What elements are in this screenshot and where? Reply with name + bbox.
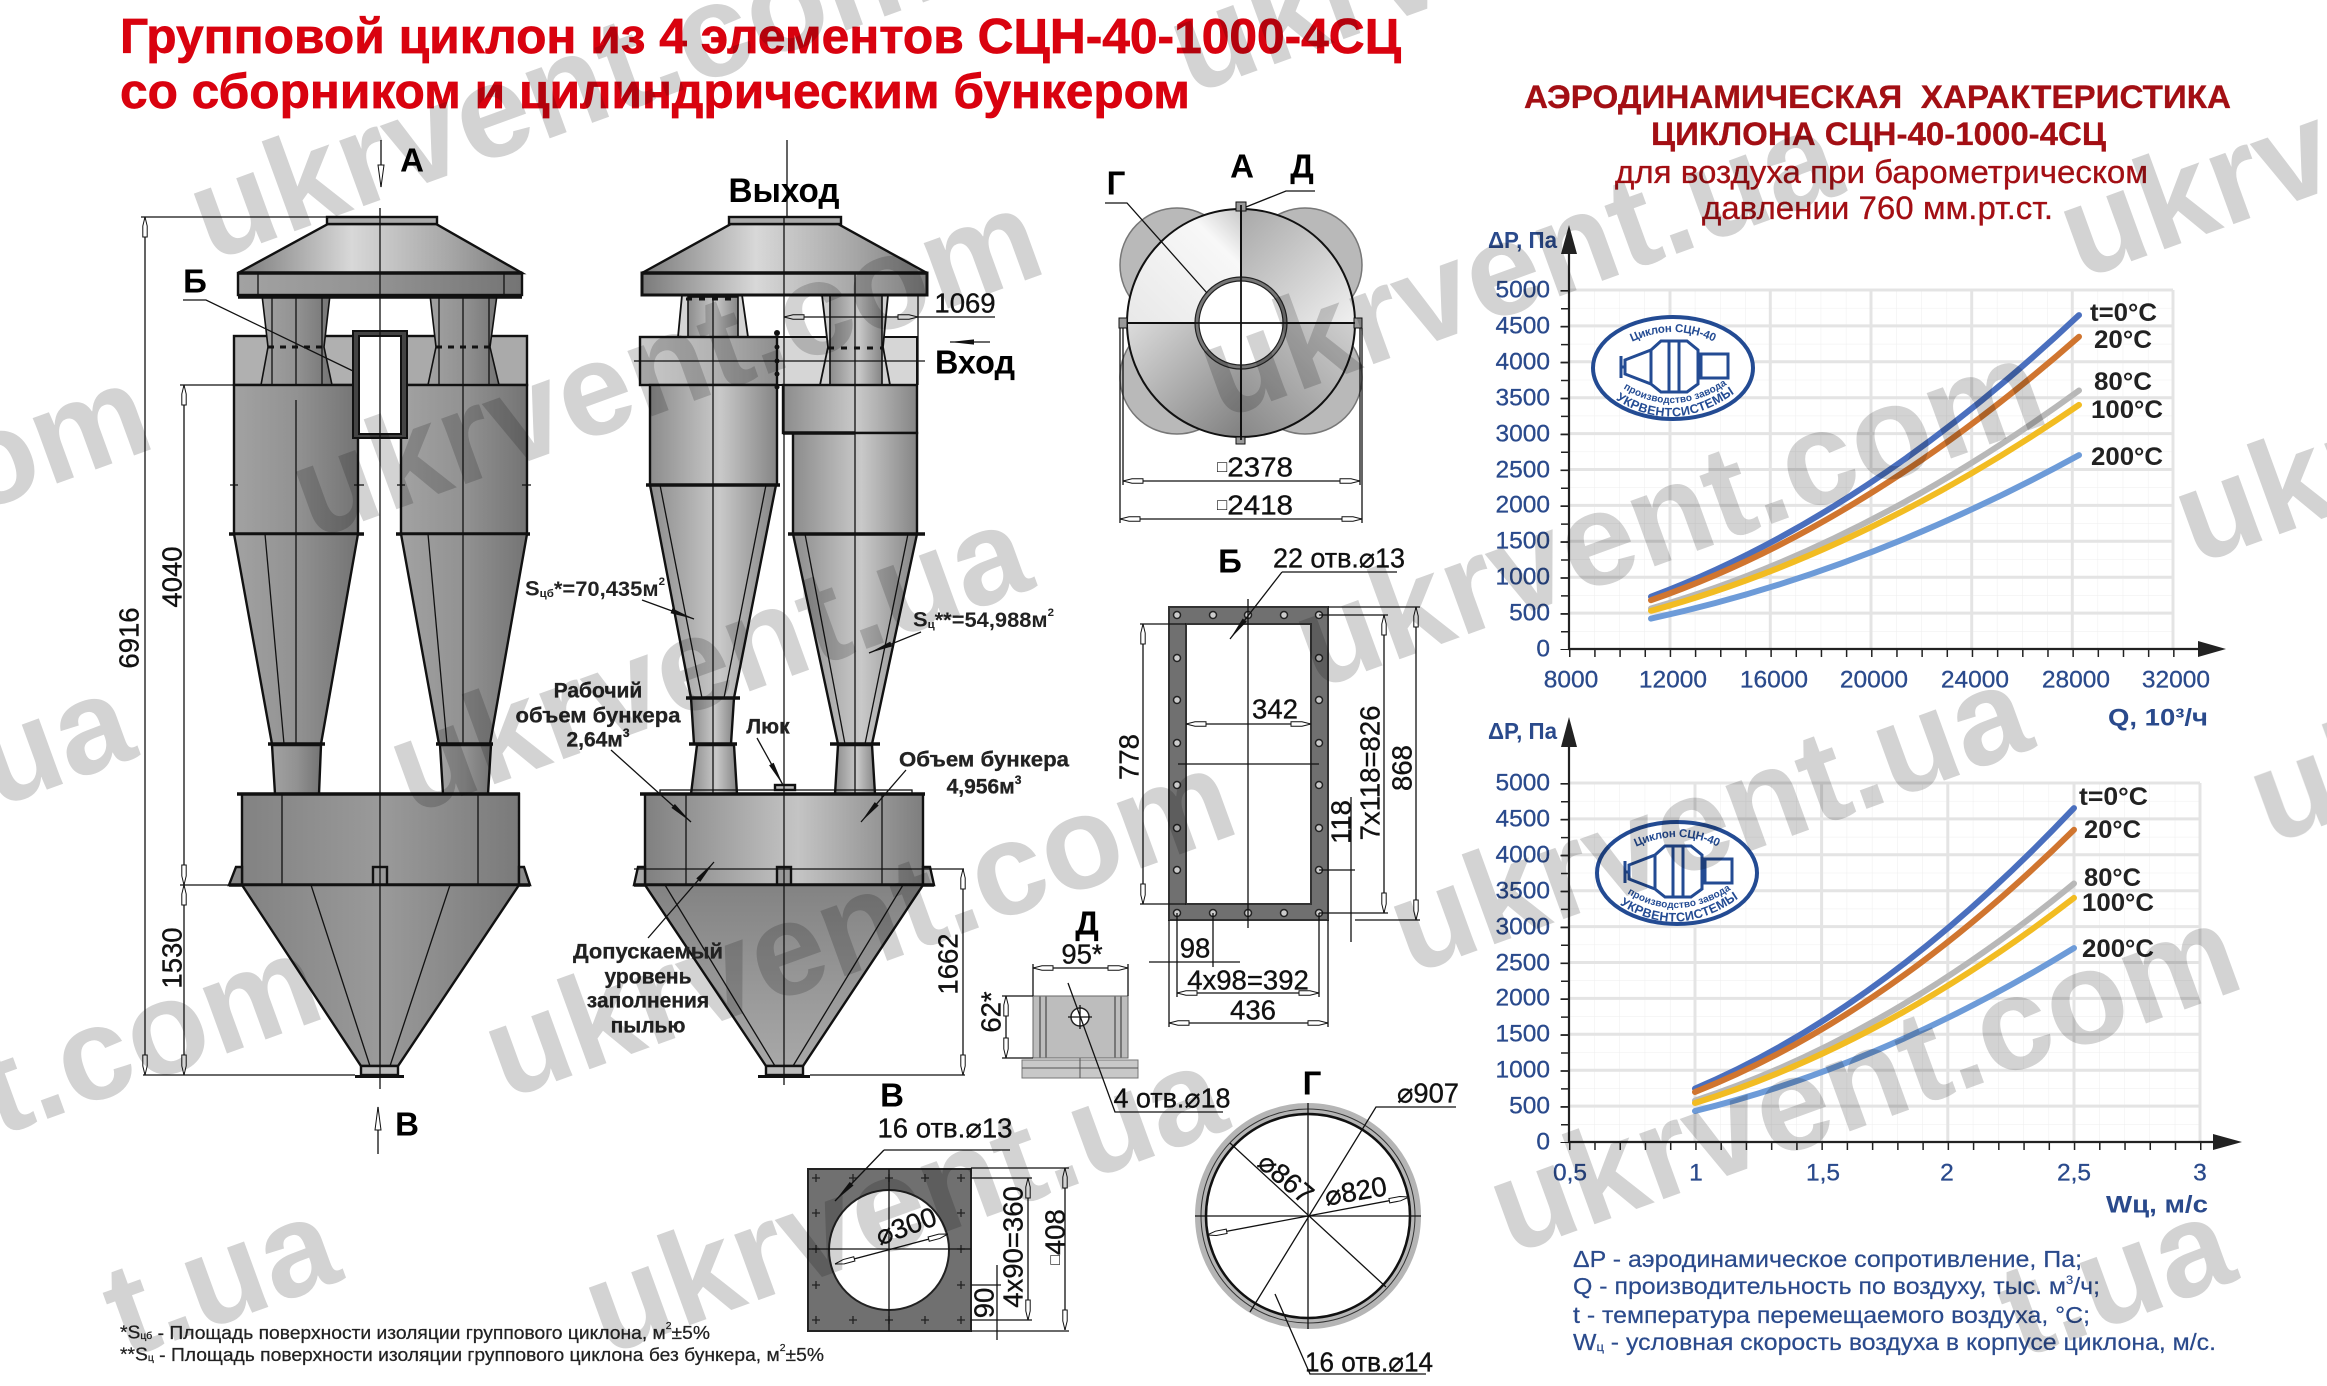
hole note: 4 отв.⌀18 [1114, 1082, 1230, 1114]
dimension 4x98=392 [1177, 913, 1319, 997]
diameter 867: ⌀867 [1252, 1146, 1320, 1210]
legend of symbols: - условная скорость воздуха в корпусе циклона, м/с. [1604, 1329, 2216, 1355]
axes [1561, 717, 2242, 1150]
footnotes: ц [148, 1352, 154, 1364]
label B with leader: Б [183, 262, 207, 300]
footnotes: **S [120, 1344, 147, 1364]
drawing: outlet flange section V [808, 1076, 1070, 1340]
dimension 436: 436 [1230, 994, 1276, 1026]
front view: inlet flange [353, 331, 407, 438]
dimension 778: 778 [1114, 734, 1144, 780]
side view: collector hood [642, 217, 927, 295]
y axis labels: 3000 [1495, 914, 1550, 940]
text: ukrvent.ua [564, 1015, 1243, 1382]
dimension 1530: 1530 [156, 927, 188, 989]
x axis labels: 2,5 [2057, 1160, 2091, 1186]
flange plate [808, 1169, 971, 1331]
curve labels: 200°C [2082, 935, 2154, 963]
y axis labels: 2500 [1495, 456, 1550, 484]
x axis labels: 20000 [1840, 666, 1908, 694]
view arrow B [375, 1106, 419, 1154]
text: ukrvent.ua [369, 474, 1048, 841]
x axis labels: 8000 [1544, 666, 1598, 694]
axes [1195, 1103, 1421, 1329]
dimension 6916: 6916 [114, 607, 144, 669]
collector disc [1127, 209, 1355, 437]
curve labels: 20°C [2094, 326, 2152, 354]
front view: collector hood [238, 217, 522, 297]
y axis labels: 4000 [1495, 842, 1550, 868]
x axis labels: 24000 [1941, 666, 2009, 694]
y axis labels: 5000 [1495, 276, 1550, 304]
side view: gas columns [678, 295, 917, 385]
callout: working bunker volume: Рабочий [554, 680, 642, 702]
view arrow A [378, 140, 424, 187]
y axis labels [1495, 276, 1550, 662]
dimension 95: 95* [1061, 938, 1103, 970]
callout: hatch: Люк [746, 716, 790, 738]
chart heading: давлении 760 мм.рт.ст. [1702, 190, 2053, 226]
y axis labels: 2000 [1495, 984, 1550, 1012]
dimension 342 [1186, 694, 1311, 724]
side view: inlet flange edge [774, 330, 780, 390]
chart heading [1524, 79, 2231, 226]
chart: pressure drop vs air flow [1488, 225, 2226, 732]
centre lines [1178, 599, 1319, 928]
curve: 100°C [1651, 405, 2079, 611]
callout: insulation area with bunker: S [525, 578, 539, 600]
dimension 2378: □2378 [1217, 452, 1293, 482]
y axis labels: 4500 [1495, 312, 1550, 340]
section label: В [880, 1076, 904, 1114]
x axis labels: 12000 [1639, 666, 1707, 694]
callout: working bunker volume: 3 [623, 726, 630, 740]
view labels: А [1230, 148, 1254, 184]
dimension 98 [1149, 913, 1240, 967]
dimension 90: 90 [968, 1288, 1000, 1318]
four cyclone lobes [1120, 208, 1362, 434]
dimension 4040: 4040 [156, 546, 188, 608]
plot grid [1569, 783, 2200, 1142]
callout: insulation area without bunker: 2 [1048, 607, 1054, 619]
curve: 20°C [1695, 830, 2074, 1092]
ring [1201, 1109, 1415, 1323]
logo stamp: производство завода [1624, 381, 1727, 406]
legend of symbols: W [1573, 1329, 1595, 1355]
legend of symbols: 3 [2066, 1273, 2074, 1287]
view labels [1105, 148, 1315, 293]
curve labels: 80°C [2094, 368, 2152, 396]
lug body [1022, 996, 1138, 1078]
y axis labels: 1000 [1495, 564, 1550, 590]
x axis labels: 1,5 [1806, 1160, 1840, 1186]
centre line [379, 208, 381, 1089]
logo stamp [1591, 315, 1755, 421]
footnotes: ±5% [672, 1322, 710, 1342]
dimension 62: 62* [976, 991, 1006, 1033]
y axis labels: 500 [1509, 600, 1550, 626]
centre lines [634, 140, 964, 1085]
dimension 118: 118 [1326, 800, 1356, 844]
callout: hatch [746, 716, 790, 785]
callout: permissible dust level: Допускаемый [573, 940, 723, 964]
y axis labels: 4500 [1495, 806, 1550, 832]
front view: cyclone bodies [229, 385, 531, 534]
legend of symbols: ц [1596, 1340, 1604, 1354]
curve labels [2079, 783, 2154, 963]
dimension 408 [971, 1168, 1070, 1331]
hole note [1068, 983, 1230, 1114]
curve labels: 100°C [2091, 396, 2163, 424]
x axis labels: 0,5 [1553, 1160, 1587, 1186]
front view: inlet housings and gas columns [234, 295, 527, 385]
dimension 7x118=826 [1319, 615, 1388, 913]
dimension 2418 [1120, 328, 1362, 523]
drawing: lug detail D [976, 904, 1230, 1114]
chart heading: ЦИКЛОНА СЦН-40-1000-4СЦ [1651, 116, 2107, 152]
chart heading: для воздуха при барометрическом [1615, 154, 2148, 190]
diameter 300 [835, 1201, 948, 1264]
side view: conical hopper with outlet [645, 885, 923, 1078]
footnotes: 2 [666, 1320, 672, 1332]
hole note [835, 1112, 1012, 1201]
curve labels: 80°C [2084, 864, 2141, 892]
callout: insulation area without bunker: ц [928, 619, 935, 631]
callout: insulation area with bunker [525, 576, 694, 619]
diameter 867 [1230, 1143, 1386, 1287]
callout: permissible dust level: заполнения [587, 990, 709, 1012]
side view: right cyclone [783, 385, 925, 794]
dimension 4040 [156, 385, 234, 885]
diameter 820 [1207, 1170, 1409, 1235]
title: Групповой циклон из 4 элементов СЦН-40-1000-4СЦ [120, 10, 1401, 64]
x axis labels [1553, 1160, 2207, 1186]
curve: 0°C [1651, 315, 2079, 597]
x axis labels: 16000 [1740, 666, 1808, 694]
curve labels: t=0°C [2090, 299, 2157, 327]
text: ukrvent.ua [1369, 634, 2048, 1001]
callout: permissible dust level [573, 862, 723, 1038]
chart heading: АЭРОДИНАМИЧЕСКАЯ ХАРАКТЕРИСТИКА [1524, 79, 2231, 115]
dimension 7x118=826: 7x118=826 [1354, 706, 1386, 840]
section label and hole note: 22 отв.⌀13 [1273, 542, 1405, 574]
y axis labels: 1000 [1495, 1056, 1550, 1084]
callout: working bunker volume [516, 680, 691, 822]
dimension 90 [968, 1265, 1001, 1340]
footnotes [120, 1320, 824, 1364]
callout: permissible dust level: уровень [605, 966, 692, 988]
drawing: top view A [1105, 148, 1362, 523]
callout: insulation area with bunker: 2 [659, 576, 665, 588]
curve labels: t=0°C [2079, 783, 2148, 811]
dimension 4x90=360 [971, 1178, 1032, 1320]
dimension 6916 [114, 217, 355, 1075]
front view: conical hopper with outlet [242, 885, 519, 1078]
dimension 95 [1033, 938, 1128, 996]
y axis labels: 1500 [1495, 528, 1550, 554]
drawing: side view of group cyclone [516, 140, 1069, 1085]
logo stamp: УКРВЕНТСИСТЕМЫ [1616, 386, 1734, 417]
x axis labels: 28000 [2042, 666, 2110, 694]
inlet label: Вход [935, 344, 1015, 380]
text: ukrvent.ua [1179, 79, 1858, 446]
footnotes: цб [140, 1330, 153, 1342]
dimension 2418: □2418 [1217, 490, 1293, 520]
dimension 436 [1169, 920, 1328, 1027]
x axis title: Wц, м/с [2106, 1192, 2208, 1218]
outlet label: Выход [728, 172, 840, 210]
front view: cyclone cones [234, 534, 527, 815]
hole note [1275, 1294, 1433, 1378]
y axis labels: 500 [1509, 1092, 1550, 1120]
callout: bunker volume: 3 [1015, 773, 1022, 787]
inlet arrow [950, 341, 990, 343]
dimension 1662: 1662 [932, 933, 964, 995]
curve labels: 100°C [2082, 889, 2154, 917]
logo stamp: производство завода [1628, 886, 1731, 910]
callout: insulation area with bunker: цб [540, 588, 554, 600]
callout: working bunker volume: объем бункера [516, 704, 681, 728]
plot grid [1569, 290, 2173, 649]
dimension 4x90=360: 4x90=360 [998, 1186, 1028, 1308]
bolt marks [812, 1174, 965, 1324]
section label: Д [1075, 904, 1099, 942]
hole note: 16 отв.⌀13 [878, 1112, 1012, 1144]
dimension 1069: 1069 [934, 288, 996, 318]
text: ukrvent.com [1274, 310, 2062, 716]
diameter 907: ⌀907 [1397, 1078, 1459, 1108]
callout: insulation area without bunker: S [913, 608, 927, 632]
dimension 62 [976, 991, 1033, 1058]
callout: bunker volume: Объем бункера [899, 748, 1069, 772]
text: ukrvent.com [271, 160, 1059, 566]
legend of symbols: /ч; [2073, 1273, 2100, 1299]
diameter 300: ⌀300 [871, 1201, 941, 1251]
x axis labels: 3 [2193, 1160, 2207, 1186]
view arrow A: А [400, 142, 424, 178]
curve: 20°C [1651, 337, 2079, 600]
logo stamp: Циклон СЦН-40 [1634, 829, 1720, 846]
curve labels: 20°C [2084, 816, 2141, 844]
x axis title: Q, 10³/ч [2108, 704, 2208, 732]
outlet ring [1195, 277, 1287, 369]
x axis labels: 32000 [2142, 666, 2210, 694]
callout: insulation area with bunker: *=70,435м [554, 578, 659, 600]
flange frame [1169, 607, 1328, 920]
y axis labels: 3000 [1495, 420, 1550, 448]
text: ukrvent.com [1469, 875, 2257, 1281]
text: t.ua [84, 1166, 357, 1385]
dimension 2378 [1123, 328, 1360, 485]
y axis labels: 3500 [1495, 384, 1550, 412]
y axis labels: 5000 [1495, 770, 1550, 796]
title: со сборником и цилиндрическим бункером [120, 65, 1190, 119]
x axis labels [1544, 666, 2210, 694]
text: t.ua [1979, 1166, 2252, 1385]
curve: 80°C [1651, 390, 2079, 608]
x axis labels: 2 [1940, 1160, 1954, 1186]
lugs [1119, 202, 1362, 444]
drawing: inlet flange section B [1114, 542, 1420, 1027]
centre lines [808, 1169, 971, 1331]
curve: 200°C [1651, 455, 2079, 619]
bolt holes [1174, 612, 1322, 916]
dimension 868: 868 [1386, 745, 1418, 791]
callout: permissible dust level: пылью [611, 1014, 685, 1038]
curve labels [2090, 299, 2163, 471]
y axis labels: 4000 [1495, 348, 1550, 376]
y axis title: ΔP, Па [1488, 718, 1557, 744]
text: ukrvent.com [464, 720, 1252, 1126]
dimension 4x98=392: 4x98=392 [1187, 964, 1309, 996]
front view: cylindrical bunker [229, 794, 530, 885]
curve: 200°C [1695, 948, 2074, 1111]
callout: insulation area without bunker [869, 607, 1054, 653]
y axis labels: 3500 [1495, 878, 1550, 904]
side view: cylindrical bunker [634, 785, 934, 885]
curve: 0°C [1695, 808, 2074, 1089]
footnotes: 2 [780, 1342, 786, 1354]
drawing: front view of group cyclone [114, 140, 531, 1154]
y axis title: ΔP, Па [1488, 227, 1557, 253]
legend of symbols [1573, 1246, 2216, 1355]
hole note: 16 отв.⌀14 [1305, 1346, 1433, 1378]
y axis labels: 0 [1536, 636, 1550, 662]
view arrow B: В [395, 1106, 419, 1142]
section label and hole note: Б [1218, 542, 1242, 580]
curve labels: 200°C [2091, 443, 2163, 471]
footnotes: - Площадь поверхности изоляции группового циклона, м [152, 1322, 666, 1342]
view labels: Г [1107, 164, 1126, 202]
footnotes: ±5% [786, 1344, 824, 1364]
drawing: flange section G [1195, 1064, 1459, 1378]
section label and hole note [1218, 542, 1405, 639]
dimension 342: 342 [1252, 694, 1298, 724]
label B with leader [183, 262, 353, 371]
y axis labels: 2000 [1495, 492, 1550, 518]
logo stamp: УКРВЕНТСИСТЕМЫ [1620, 892, 1738, 922]
logo stamp [1595, 820, 1759, 926]
title [120, 10, 1401, 119]
axes [1127, 205, 1355, 440]
logo stamp: Циклон СЦН-40 [1630, 324, 1716, 342]
side view: left cyclone [640, 337, 780, 794]
diameter 820: ⌀820 [1322, 1170, 1389, 1212]
section label: Г [1303, 1064, 1322, 1102]
curve: 80°C [1695, 884, 2074, 1101]
diameter 907 [1250, 1078, 1459, 1312]
dimension 778 [1114, 624, 1186, 904]
axes [1561, 225, 2226, 657]
legend of symbols: t - температура перемещаемого воздуха, °С; [1573, 1302, 2090, 1328]
curve: 100°C [1695, 898, 2074, 1103]
footnotes: *S [120, 1322, 140, 1342]
callout: working bunker volume: 2,64м [566, 728, 623, 752]
footnotes: - Площадь поверхности изоляции группового циклона без бункера, м [154, 1344, 780, 1364]
dimension 118 [1319, 797, 1356, 942]
dimension 408: □408 [1040, 1209, 1070, 1265]
chart: pressure drop vs velocity [1488, 717, 2242, 1218]
legend of symbols: Q - производительность по воздуху, тыс. м [1573, 1273, 2029, 1299]
y axis labels [1495, 770, 1550, 1156]
x axis labels: 1 [1689, 1160, 1703, 1186]
legend of symbols: ΔP - аэродинамическое сопротивление, Па; [1573, 1246, 2082, 1272]
callout: bunker volume [861, 748, 1069, 822]
callout: bunker volume: 4,956м [947, 776, 1015, 798]
y axis labels: 0 [1536, 1128, 1550, 1156]
dimension 98: 98 [1180, 932, 1210, 964]
y axis labels: 1500 [1495, 1020, 1550, 1048]
view labels: Д [1290, 148, 1314, 184]
y axis labels: 2500 [1495, 950, 1550, 976]
dimension 868 [1328, 607, 1420, 920]
callout: insulation area without bunker: **=54,988м [935, 608, 1048, 632]
